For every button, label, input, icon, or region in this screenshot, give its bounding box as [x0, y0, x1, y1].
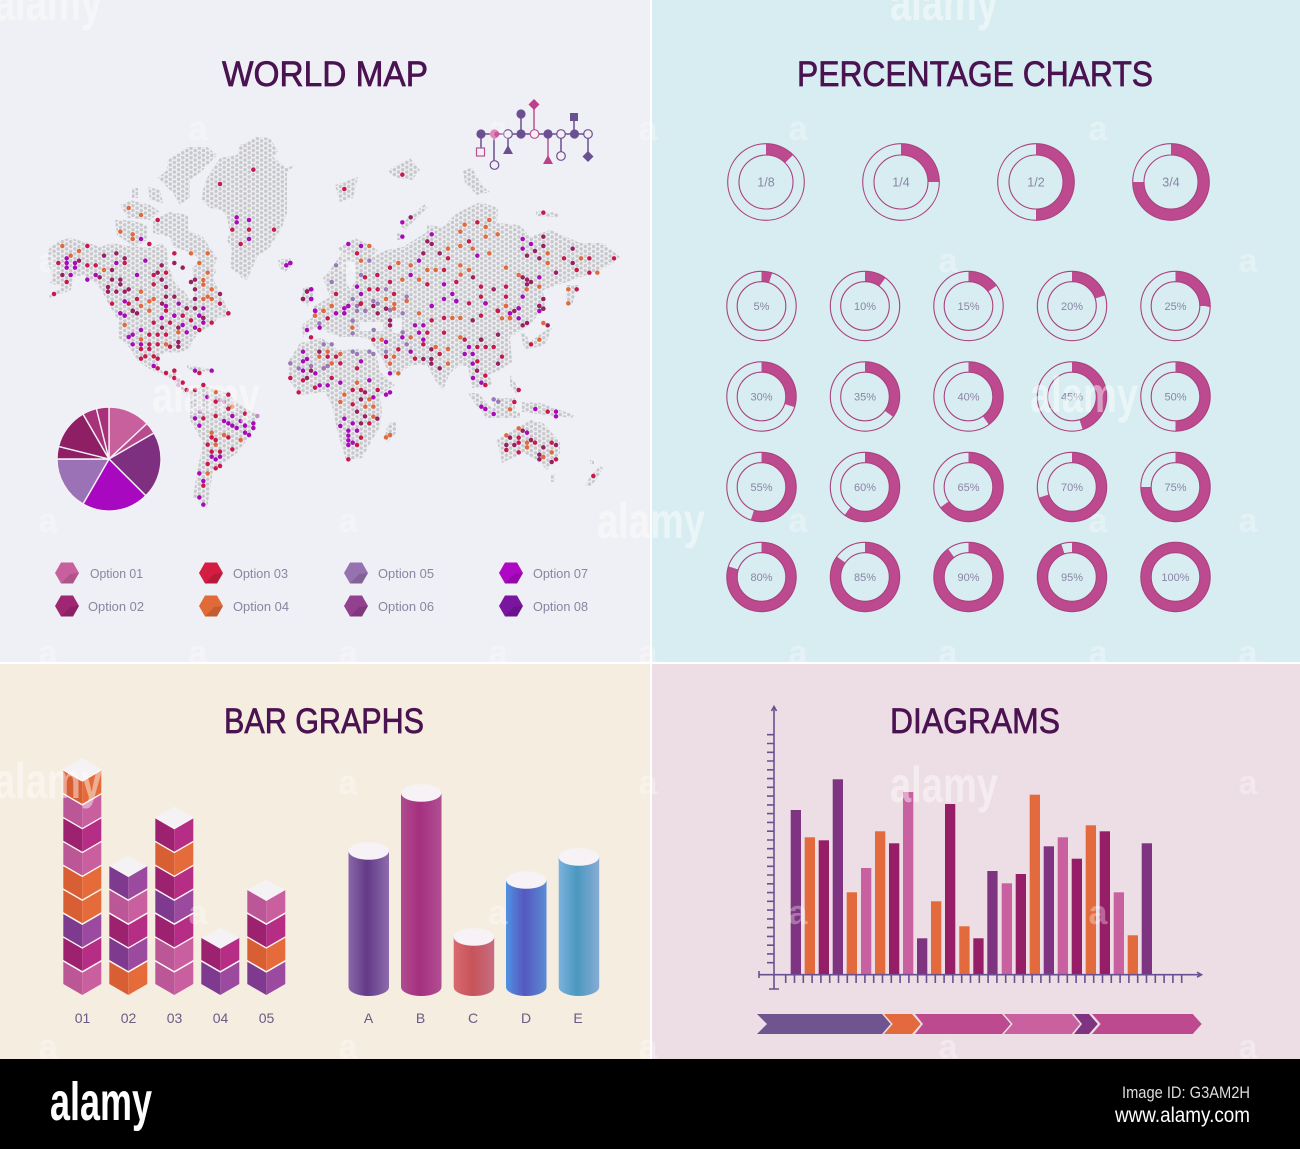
donut 1/2: 1/2: [1027, 176, 1045, 190]
watermarks: a: [339, 502, 359, 540]
heading: percentage charts: PERCENTAGE CHARTS: [797, 55, 1153, 94]
donut 20%: [1037, 271, 1107, 341]
donut 50%: 50%: [1164, 392, 1187, 404]
legend item: option 04: Option 04: [233, 599, 289, 614]
cylinder D: [506, 871, 546, 996]
watermarks: a: [189, 634, 209, 672]
column labels: 05: [259, 1010, 274, 1026]
legend item: option 01: Option 01: [90, 566, 143, 581]
watermarks: a: [939, 242, 959, 280]
donut 15%: 15%: [957, 301, 980, 313]
donut 3/4: [1133, 144, 1209, 220]
cylinder E: [559, 848, 599, 996]
cylinder labels: A: [364, 1010, 374, 1026]
donut 25%: [1141, 271, 1210, 341]
watermarks: a: [489, 894, 509, 932]
donut 100%: 100%: [1161, 572, 1190, 584]
watermarks: a: [39, 242, 59, 280]
donut 15%: [934, 271, 1003, 341]
cylinder A: [348, 842, 389, 996]
donut 40%: 40%: [957, 392, 980, 404]
cylinder labels: [364, 1010, 583, 1026]
stacked isometric column 04: [201, 928, 239, 995]
stacked isometric column 01: [63, 758, 101, 995]
donut 30%: [727, 362, 796, 431]
donut 30%: 30%: [750, 392, 773, 404]
stacked isometric column 03: [155, 807, 193, 995]
cylinder labels: E: [573, 1010, 583, 1026]
donut 35%: [830, 362, 900, 431]
donut 80%: 80%: [750, 572, 773, 584]
donut 1/4: 1/4: [892, 176, 910, 190]
column labels: 02: [121, 1010, 136, 1026]
heading: bar graphs: BAR GRAPHS: [224, 702, 424, 741]
donut 1/8: 1/8: [757, 176, 775, 190]
donut 40%: [934, 362, 1003, 431]
donut 45%: [1037, 362, 1107, 431]
legend item: option 02: Option 02: [88, 599, 144, 614]
donut 60%: 60%: [854, 482, 876, 494]
cylinder B: [401, 784, 442, 996]
bars: [791, 779, 1152, 974]
donut 95%: 95%: [1061, 572, 1083, 584]
legend item: option 05: [344, 562, 434, 584]
watermarks: a: [789, 502, 809, 540]
legend item: option 06: [344, 596, 434, 616]
legend item: option 06: Option 06: [378, 599, 434, 614]
column labels: 03: [167, 1010, 182, 1026]
footer bar: [0, 1059, 1300, 1149]
panel: bar graphs: [0, 664, 650, 1059]
watermarks: a: [639, 110, 659, 148]
column labels: [75, 1010, 274, 1026]
dotted world map: [40, 130, 630, 520]
donut 45%: 45%: [1061, 392, 1083, 404]
watermarks: a: [639, 634, 659, 672]
donut 5%: [727, 271, 796, 341]
pie chart: [57, 407, 161, 511]
stacked isometric column 02: [109, 856, 147, 995]
footer image id: Image ID: G3AM2H: [1122, 1083, 1250, 1102]
heading: world map: WORLD MAP: [222, 55, 428, 94]
legend item: option 03: Option 03: [233, 566, 288, 581]
donut 10%: [830, 271, 900, 341]
watermarks: a: [939, 1028, 959, 1066]
footer url: www.alamy.com: [1114, 1104, 1250, 1127]
watermarks: a: [639, 1028, 659, 1066]
watermarks: a: [1089, 110, 1109, 148]
donut 35%: 35%: [854, 392, 876, 404]
stacked isometric column 05: [247, 880, 285, 995]
donut 60%: [830, 452, 900, 522]
chart axes: [759, 706, 1202, 989]
cylinder C: [454, 928, 494, 996]
watermarks: a: [489, 110, 509, 148]
donut 1/8: [728, 144, 804, 220]
cylinder labels: C: [468, 1010, 478, 1026]
donut 55%: 55%: [750, 482, 773, 494]
watermarks: a: [489, 634, 509, 672]
donut 85%: [830, 542, 900, 612]
legend item: option 07: Option 07: [533, 566, 588, 581]
legend item: option 07: [499, 562, 588, 584]
heading: diagrams: DIAGRAMS: [890, 702, 1060, 741]
watermarks: alamy: [1030, 367, 1138, 423]
donut 85%: 85%: [854, 572, 876, 584]
watermarks: a: [189, 110, 209, 148]
donut 1/2: [998, 144, 1074, 220]
watermarks: a: [39, 502, 59, 540]
donut 70%: [1037, 452, 1107, 522]
watermarks: a: [789, 894, 809, 932]
watermarks: a: [339, 764, 359, 802]
donut 95%: [1037, 542, 1107, 612]
donut 65%: [934, 452, 1003, 522]
legend item: option 03: [199, 562, 288, 584]
legend item: option 01: [55, 562, 143, 584]
watermarks: a: [339, 1028, 359, 1066]
watermarks: alamy: [890, 757, 998, 813]
donut 80%: [727, 542, 796, 612]
watermarks: a: [1239, 764, 1259, 802]
donut 90%: 90%: [957, 572, 980, 584]
panel: percentage charts: [652, 0, 1300, 662]
column labels: 01: [75, 1010, 90, 1026]
panel: world map: [0, 0, 650, 662]
watermarks: a: [1089, 894, 1109, 932]
watermarks: a: [939, 634, 959, 672]
legend item: option 08: [499, 596, 588, 616]
watermarks: alamy: [152, 367, 260, 423]
donut 3/4: 3/4: [1162, 176, 1180, 190]
watermarks: a: [189, 894, 209, 932]
cylinder labels: D: [521, 1010, 531, 1026]
legend item: option 05: Option 05: [378, 566, 434, 581]
legend: [55, 562, 588, 616]
watermarks: a: [339, 634, 359, 672]
donut 55%: [727, 452, 796, 522]
watermarks: a: [1239, 634, 1259, 672]
watermarks: a: [1239, 502, 1259, 540]
donut 90%: [934, 542, 1003, 612]
network icon: [476, 99, 594, 169]
cylinder labels: B: [416, 1010, 425, 1026]
donut 20%: 20%: [1061, 301, 1083, 313]
donut 75%: [1141, 452, 1210, 522]
donut 1/4: [863, 144, 939, 220]
watermarks: a: [1239, 242, 1259, 280]
donut 50%: [1141, 362, 1210, 431]
legend item: option 04: [199, 596, 289, 616]
legend item: option 08: Option 08: [533, 599, 588, 614]
footer logo: alamy: [50, 1072, 152, 1132]
donut 70%: 70%: [1061, 482, 1083, 494]
watermarks: a: [639, 764, 659, 802]
chevron process strip: [757, 1014, 1202, 1034]
watermarks: a: [39, 1028, 59, 1066]
column labels: 04: [213, 1010, 228, 1026]
watermarks: a: [1089, 634, 1109, 672]
watermarks: a: [1239, 1028, 1259, 1066]
donut 65%: 65%: [957, 482, 980, 494]
donut 25%: 25%: [1164, 301, 1187, 313]
watermarks: alamy: [597, 493, 705, 549]
watermarks: a: [39, 634, 59, 672]
donut 100%: [1141, 542, 1210, 612]
donut 10%: 10%: [854, 301, 876, 313]
watermarks: a: [789, 110, 809, 148]
panel: diagrams: [652, 664, 1300, 1059]
legend item: option 02: [55, 596, 144, 616]
donut 75%: 75%: [1164, 482, 1187, 494]
watermarks: a: [789, 634, 809, 672]
donut 5%: 5%: [754, 301, 770, 313]
watermarks: a: [1089, 502, 1109, 540]
watermarks: a: [339, 242, 359, 280]
